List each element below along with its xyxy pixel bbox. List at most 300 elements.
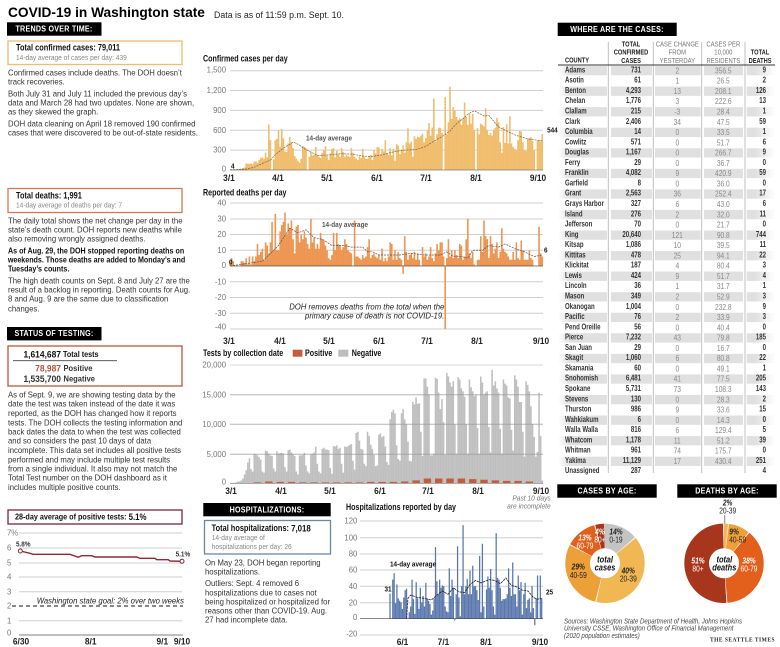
text block: deaths notes: As of Aug. 29, the DOH stopped reporting deaths on	[8, 246, 184, 256]
chart: confirmed cases per day: 544	[547, 127, 558, 134]
table rows: Grays Harbor	[565, 200, 604, 208]
donut chart: deaths by age: 51%	[691, 556, 705, 566]
text block: deaths notes: 8 and Aug. 9 are the same due to classification	[8, 294, 169, 304]
donut chart: cases by age: 14%	[609, 527, 623, 537]
table rows: 0	[675, 138, 679, 148]
donut chart: deaths by age: 60-79	[741, 564, 757, 574]
chart: confirmed cases per day	[203, 54, 558, 183]
table rows: 1,060	[626, 355, 641, 362]
text block: cases notes: cases that were discovered to be out-of-state residents.	[8, 128, 198, 138]
table rows: 13	[674, 86, 681, 96]
table rows: 51.7	[717, 138, 730, 148]
note: past 10 days incomplete: Past 10 days	[512, 495, 551, 503]
chart: tests by collection date: 15,000	[202, 390, 226, 399]
text block: cases notes: DOH data cleaning on April 18 removed 190 confirmed	[8, 119, 196, 129]
sources: University CSSE, Washington Office of Financial Management	[564, 625, 734, 633]
table header: FROM	[669, 49, 686, 57]
table rows: 0	[763, 416, 766, 424]
table rows: 5,731	[626, 385, 641, 393]
table rows: 28.3	[717, 395, 730, 404]
donut chart: cases by age: total	[597, 555, 614, 565]
table rows: 26.5	[717, 76, 730, 86]
text block: hospitalization notes: reasons other than COVID-19. Aug.	[205, 606, 327, 616]
sources: (2020 population estimates)	[564, 632, 640, 640]
table rows: 9	[675, 271, 679, 281]
table rows: 33.9	[717, 313, 730, 322]
table rows: 9	[763, 67, 766, 75]
table header	[565, 41, 772, 65]
table rows: 47.5	[717, 117, 730, 127]
chart: reported deaths per day	[203, 188, 549, 346]
table rows: 232.8	[715, 302, 732, 312]
table rows: 33.5	[717, 128, 730, 137]
chart: confirmed cases per day: 1,200	[207, 86, 226, 95]
table rows: 14	[634, 128, 641, 136]
text block: cases notes: as they skewed the graph.	[8, 107, 98, 117]
table rows: 287	[631, 468, 641, 475]
text block: testing notes: As of Sept. 9, we are showing testing data by the	[8, 390, 176, 399]
line chart: positive test rate: 1	[7, 616, 12, 625]
table rows: 3	[763, 262, 766, 270]
callout: testing totals	[8, 346, 182, 386]
heading: deaths by age	[677, 484, 777, 498]
table rows: Garfield	[565, 180, 588, 188]
table rows: 36	[674, 189, 681, 199]
table rows: 4	[763, 272, 766, 280]
callout: testing totals: 1,535,700	[23, 374, 61, 384]
table header: COUNTY	[565, 57, 590, 65]
chart: hospitalizations reported by day: 6/1	[397, 637, 409, 647]
annotation: death removals: primary cause of death is not COVID-19.	[304, 311, 444, 320]
table rows: 59	[759, 170, 766, 177]
chart: hospitalizations reported by day: 40	[349, 582, 358, 591]
table rows: 9	[763, 303, 766, 311]
table rows: Skamania	[565, 365, 593, 373]
heading: trends over time	[7, 22, 102, 36]
chart: confirmed cases per day: 600	[213, 126, 226, 135]
table rows: 7,232	[626, 334, 641, 342]
donut chart: deaths by age: 38%	[742, 556, 756, 566]
table rows: 74	[674, 446, 681, 456]
chart: confirmed cases per day: 7/1	[420, 173, 432, 183]
table bands	[558, 66, 775, 466]
table rows: 2	[763, 77, 766, 85]
table rows: 40.4	[717, 323, 730, 333]
table rows: 21.7	[717, 220, 730, 230]
donut chart: deaths by age: 20-39	[719, 506, 736, 516]
table rows: 25	[674, 251, 681, 261]
table rows: Cowlitz	[565, 139, 587, 147]
callout: total confirmed cases	[8, 41, 182, 64]
chart: reported deaths per day: 40	[217, 198, 226, 208]
table rows: Mason	[565, 293, 584, 301]
line chart: positive test rate: 6/30	[13, 636, 29, 646]
table rows: Okanogan	[565, 303, 595, 311]
table rows: Kittitas	[565, 252, 586, 260]
donut chart: cases by age: 40-59	[570, 570, 587, 580]
text block: testing notes: tests. The DOH collects the testing information and	[8, 418, 183, 427]
donut chart: cases by age: 13%	[578, 533, 592, 543]
text block: testing notes: back dates the data to when the test was collected	[8, 427, 181, 437]
chart: tests by collection date: 3/1	[225, 486, 237, 496]
table rows: 43	[674, 333, 681, 343]
chart: hospitalizations reported by day: 20	[349, 598, 358, 607]
chart: reported deaths per day: 6/1	[373, 336, 385, 346]
table rows: 94.1	[717, 251, 730, 261]
table rows: Benton	[565, 87, 586, 95]
table rows: 3	[763, 293, 766, 301]
table rows: 0	[763, 159, 766, 167]
donut chart: deaths by age: 9%	[729, 527, 739, 537]
table rows: 1	[763, 128, 766, 136]
table rows: Franklin	[565, 170, 589, 177]
table rows: 1,086	[626, 241, 641, 249]
table rows: 6	[638, 416, 641, 424]
table rows: 43.0	[717, 199, 730, 209]
table rows: Pend Oreille	[565, 324, 601, 332]
text block: deaths notes	[7, 216, 190, 314]
chart: reported deaths per day: -20	[215, 293, 226, 302]
chart: hospitalizations reported by day: 120	[344, 516, 358, 526]
table header: TOTAL	[751, 49, 769, 57]
table rows: 29	[634, 344, 641, 352]
table rows: Clark	[565, 118, 580, 126]
table rows: 2	[675, 292, 679, 302]
text block: cases notes: Confirmed cases include deaths. The DOH doesn’t	[8, 68, 183, 78]
table rows: 20,640	[622, 231, 641, 239]
chart: tests by collection date: 5,000	[207, 450, 226, 459]
chart title: confirmed cases: Confirmed cases per day	[203, 54, 288, 64]
table header: TOTAL	[622, 41, 640, 49]
table rows: 0	[763, 180, 766, 188]
table rows: Ferry	[565, 159, 580, 167]
text block: cases notes: track recoveries.	[8, 77, 65, 87]
table rows: 478	[631, 252, 641, 260]
callout: testing totals: 78,987	[35, 363, 61, 374]
table rows: 731	[631, 67, 641, 75]
chart: reported deaths per day: 8/1	[471, 336, 483, 346]
table rows: 0	[763, 221, 766, 229]
table rows: Stevens	[565, 396, 588, 404]
table rows: Lewis	[565, 272, 582, 280]
table rows: 4,082	[626, 170, 641, 177]
text block: deaths notes: Tuesday’s counts.	[8, 264, 69, 274]
table rows: 17	[759, 190, 766, 198]
table rows: 15	[759, 406, 766, 414]
chart: hospitalizations reported by day: 25	[546, 589, 553, 597]
table rows: 60	[634, 365, 641, 373]
table rows: Unassigned	[565, 468, 599, 475]
callout: total hospitalizations: Total hospitalizations: 7,018	[212, 523, 311, 534]
table rows: 0	[675, 395, 679, 404]
callout: testing totals: Total tests	[63, 349, 99, 359]
table rows: 986	[631, 406, 641, 414]
callout: testing totals: Negative	[64, 374, 96, 384]
table rows: 0	[763, 324, 766, 332]
chart: reported deaths per day: 10	[217, 245, 226, 255]
table rows: 1	[675, 76, 679, 86]
text block: testing notes: performed and may include multiple test results	[8, 455, 170, 464]
table rows: 51.7	[717, 271, 730, 281]
table rows: 4	[763, 468, 766, 475]
chart: reported deaths per day: 0	[222, 261, 226, 270]
table rows: 0	[675, 128, 679, 137]
chart: tests by collection date	[202, 348, 551, 511]
chart: tests by collection date: 6/1	[374, 486, 386, 496]
table rows: Jefferson	[565, 221, 592, 229]
chart: hospitalizations reported by day	[344, 502, 553, 647]
table rows: 276	[631, 211, 641, 219]
table rows: 349	[631, 293, 641, 301]
donut chart: cases by age: 29%	[571, 562, 585, 572]
chart: hospitalizations reported by day: 0	[353, 613, 358, 622]
table rows: San Juan	[565, 344, 592, 352]
text block: deaths notes: The high death counts on Sept. 8 and July 27 are the	[8, 276, 190, 286]
table rows: 420.9	[715, 169, 732, 178]
callout: testing totals: Positive	[64, 364, 93, 373]
table rows: 49.1	[717, 364, 730, 374]
table rows: 0	[675, 415, 679, 425]
text block: hospitalization notes: Outliers: Sept. 4 removed 6	[205, 579, 300, 588]
table rows: 36	[634, 283, 641, 290]
table rows: 6,481	[626, 375, 641, 383]
table rows: 1,776	[626, 98, 641, 105]
table rows: 1	[763, 283, 766, 290]
table rows: Kitsap	[565, 241, 584, 249]
chart: reported deaths per day: 9/10	[533, 336, 549, 346]
callout: total hospitalizations	[204, 520, 330, 554]
table rows: Island	[565, 211, 583, 219]
label: 14-day average deaths: 14-day average	[322, 222, 368, 229]
callout: total deaths	[8, 188, 182, 212]
donut chart: deaths by age: deaths	[712, 563, 737, 573]
table rows: Lincoln	[565, 283, 587, 290]
chart: tests by collection date: 7/1	[422, 486, 434, 496]
table rows: 11	[760, 241, 766, 249]
table rows: Pacific	[565, 313, 585, 321]
chart: reported deaths per day: 30	[217, 214, 226, 224]
chart title: deaths: Reported deaths per day	[203, 188, 287, 198]
table rows: 2,563	[626, 190, 641, 198]
donut chart: cases by age: 60-79	[577, 541, 593, 551]
table rows: 1,167	[626, 149, 641, 157]
table header: CASES	[621, 57, 641, 65]
table rows: 11	[674, 436, 681, 446]
table rows: Columbia	[565, 128, 593, 136]
table rows: 51.2	[717, 436, 730, 446]
chart: reported deaths per day: 20	[217, 230, 226, 239]
table rows: Wahkiakum	[565, 416, 599, 424]
table rows: 143	[756, 385, 766, 393]
chart: confirmed cases per day: 4	[231, 163, 235, 170]
line chart: positive test rate: 9/10	[174, 636, 190, 646]
callout: 28-day positive average: 28-day average of positive tests: 5.1%	[15, 512, 147, 522]
text block: testing notes: date the test was taken instead of the date it was	[8, 399, 175, 409]
table rows: 0	[675, 158, 679, 168]
table rows: 17	[674, 456, 681, 466]
table rows: 215	[631, 108, 641, 116]
table rows: 205	[756, 375, 766, 383]
table rows: 90.8	[717, 230, 730, 240]
table rows: 4	[675, 261, 679, 271]
table header: RESIDENTS	[706, 57, 741, 65]
text block: testing notes: incomplete. This data set includes all positive tests	[8, 446, 181, 455]
chart: reported deaths per day: 5/1	[323, 336, 335, 346]
table rows: Adams	[565, 67, 585, 75]
table rows: 0	[763, 344, 766, 352]
table rows: Clallam	[565, 108, 587, 116]
text block: cases notes: Both July 31 and July 11 included the previous day’s	[8, 89, 187, 99]
table rows: Thurston	[565, 406, 591, 414]
table rows: 2,406	[626, 118, 641, 126]
table rows: 185	[756, 334, 766, 342]
note: past 10 days incomplete	[507, 495, 551, 511]
chart: hospitalizations reported by day: 31	[384, 586, 392, 593]
chart: tests by collection date: 0	[222, 477, 226, 487]
table rows: 222.6	[715, 97, 732, 106]
text block: hospitalization notes: hospitalizations due to cases not	[205, 588, 317, 597]
chart: hospitalizations reported by day: 7/1	[438, 637, 450, 647]
callout: total hospitalizations: 14-day average of	[212, 533, 265, 542]
table rows: 6	[675, 426, 679, 435]
text block: deaths notes: state’s death count. DOH reports new deaths while	[8, 225, 182, 235]
table: county data	[558, 41, 775, 475]
table rows: 121	[672, 230, 683, 240]
text block: testing notes: reported, as the DOH has changed how it reports	[8, 409, 176, 418]
table rows: 187	[631, 262, 641, 270]
callout: testing totals: 1,614,687	[23, 349, 61, 360]
table rows: 80.4	[717, 261, 730, 271]
heading: hospitalizations: HOSPITALIZATIONS:	[230, 505, 304, 515]
table rows: 266.7	[715, 148, 732, 158]
heading: trends over time: TRENDS OVER TIME:	[15, 24, 93, 34]
table rows: 79.8	[717, 333, 730, 343]
table rows: 39.5	[717, 241, 730, 250]
table rows: Walla Walla	[565, 426, 598, 434]
annotation: death removals: DOH removes deaths from the total when the	[289, 302, 445, 312]
text block: deaths notes: also removing wrongly assigned deaths.	[8, 234, 146, 244]
chart: reported deaths per day: -30	[215, 308, 226, 318]
table rows: 2	[675, 210, 679, 219]
donut chart: cases by age: 40%	[621, 566, 635, 576]
chart: confirmed cases per day: 9/10	[530, 173, 546, 183]
line chart: positive test rate: Washington state goal: 2% over two weeks	[37, 596, 184, 605]
table rows: 2	[675, 66, 679, 76]
callout: total deaths: Total deaths: 1,991	[16, 191, 82, 201]
sources: Sources: Washington State Department of Health, Johns Hopkins	[564, 618, 743, 626]
chart: tests by collection date: 4/1	[275, 486, 287, 496]
chart: tests by collection date: 8/1	[472, 486, 484, 496]
chart: tests by collection date: 10,000	[202, 420, 226, 429]
chart: hospitalizations reported by day: 80	[349, 549, 358, 559]
table rows: 0	[675, 220, 679, 230]
table rows: 744	[756, 231, 766, 239]
text block: testing notes: and so considers the past 10 days of data	[8, 436, 152, 446]
table rows: 1	[763, 108, 766, 116]
heading: cases by age	[557, 484, 657, 498]
table rows: Asotin	[565, 77, 584, 85]
chart: confirmed cases per day: 900	[213, 106, 226, 115]
date note: Data is as of 11:59 p.m. Sept. 10.	[214, 10, 344, 20]
chart title: hospitalizations: Hospitalizations reported by day	[346, 502, 456, 512]
table rows: 34	[674, 117, 681, 127]
table rows: Snohomish	[565, 375, 598, 383]
chart: tests by collection date: 5/1	[324, 486, 336, 496]
table rows: 29	[634, 159, 641, 167]
chart: confirmed cases per day: 6/1	[371, 173, 383, 183]
text block: hospitalization notes: On May 23, DOH began reporting	[205, 558, 321, 567]
table rows: 0	[675, 179, 679, 189]
text block: cases notes	[8, 68, 198, 138]
chart: confirmed cases per day: 1,500	[207, 65, 226, 75]
table header: DEATHS	[749, 57, 772, 65]
table rows: 2	[675, 313, 679, 322]
line chart: positive test rate: 8/1	[85, 636, 97, 646]
table rows: 14.3	[717, 415, 730, 425]
table rows: 10	[674, 241, 681, 250]
chart title and legend: Negative	[352, 348, 382, 358]
table rows: 0	[675, 364, 679, 374]
table rows: Spokane	[565, 385, 590, 393]
table rows: Chelan	[565, 98, 585, 105]
text block: hospitalization notes: 27 had incomplete data.	[205, 615, 288, 625]
chart: hospitalizations reported by day: 9/10	[532, 637, 548, 647]
text block: hospitalization notes: hospitalizations.	[205, 567, 260, 576]
label: 14-day average hospitalizations: 14-day average	[390, 561, 436, 569]
donut chart: deaths by age: 40-59	[729, 535, 746, 545]
table rows: -3	[674, 107, 680, 117]
line chart: positive test rate: 6	[7, 543, 12, 553]
table rows: 430.4	[715, 456, 732, 466]
table rows: 73	[674, 384, 681, 394]
chart: confirmed cases per day: 300	[213, 145, 226, 155]
table rows: King	[565, 231, 579, 239]
table rows: 6	[675, 199, 679, 209]
table rows: 59	[759, 118, 766, 126]
table header: CONFIRMED	[614, 49, 648, 57]
table rows: 41	[674, 374, 681, 384]
line chart: positive test rate: 7%	[7, 528, 18, 538]
line chart: positive test rate: 9/1	[156, 636, 168, 646]
donut chart: cases by age: cases	[595, 563, 616, 573]
chart: tests by collection date: 9/10	[533, 486, 549, 496]
donut chart: cases by age: 20-39	[620, 574, 637, 584]
heading: cases by age: CASES BY AGE:	[577, 486, 637, 496]
table rows: 1,004	[626, 303, 641, 311]
donut chart: deaths by age: 80+	[692, 564, 704, 574]
callout: total hospitalizations: hospitalizations per day: 26	[212, 543, 292, 551]
callout: total deaths: 14-day average of deaths per day: 7	[16, 201, 122, 210]
table rows: Skagit	[565, 355, 584, 362]
chart title and legend: Positive	[305, 348, 333, 358]
chart: reported deaths per day: 0	[229, 259, 233, 267]
table rows: 816	[631, 426, 641, 434]
table rows: Yakima	[565, 457, 586, 465]
chart: hospitalizations reported by day: 100	[344, 533, 358, 542]
table rows: 571	[631, 139, 641, 147]
donut chart: cases by age: 0-19	[609, 535, 623, 545]
table rows: 251	[756, 457, 766, 465]
table rows: 9	[675, 405, 679, 415]
chart: hospitalizations reported by day: 60	[349, 565, 358, 575]
table rows: 0	[675, 323, 679, 333]
table rows: 175.7	[715, 446, 732, 456]
line chart: positive test rate	[7, 528, 191, 646]
line chart: positive test rate: 3	[7, 587, 12, 596]
table rows: 130	[631, 396, 641, 404]
table rows: 356.5	[715, 66, 732, 76]
table rows: 9	[675, 169, 679, 178]
